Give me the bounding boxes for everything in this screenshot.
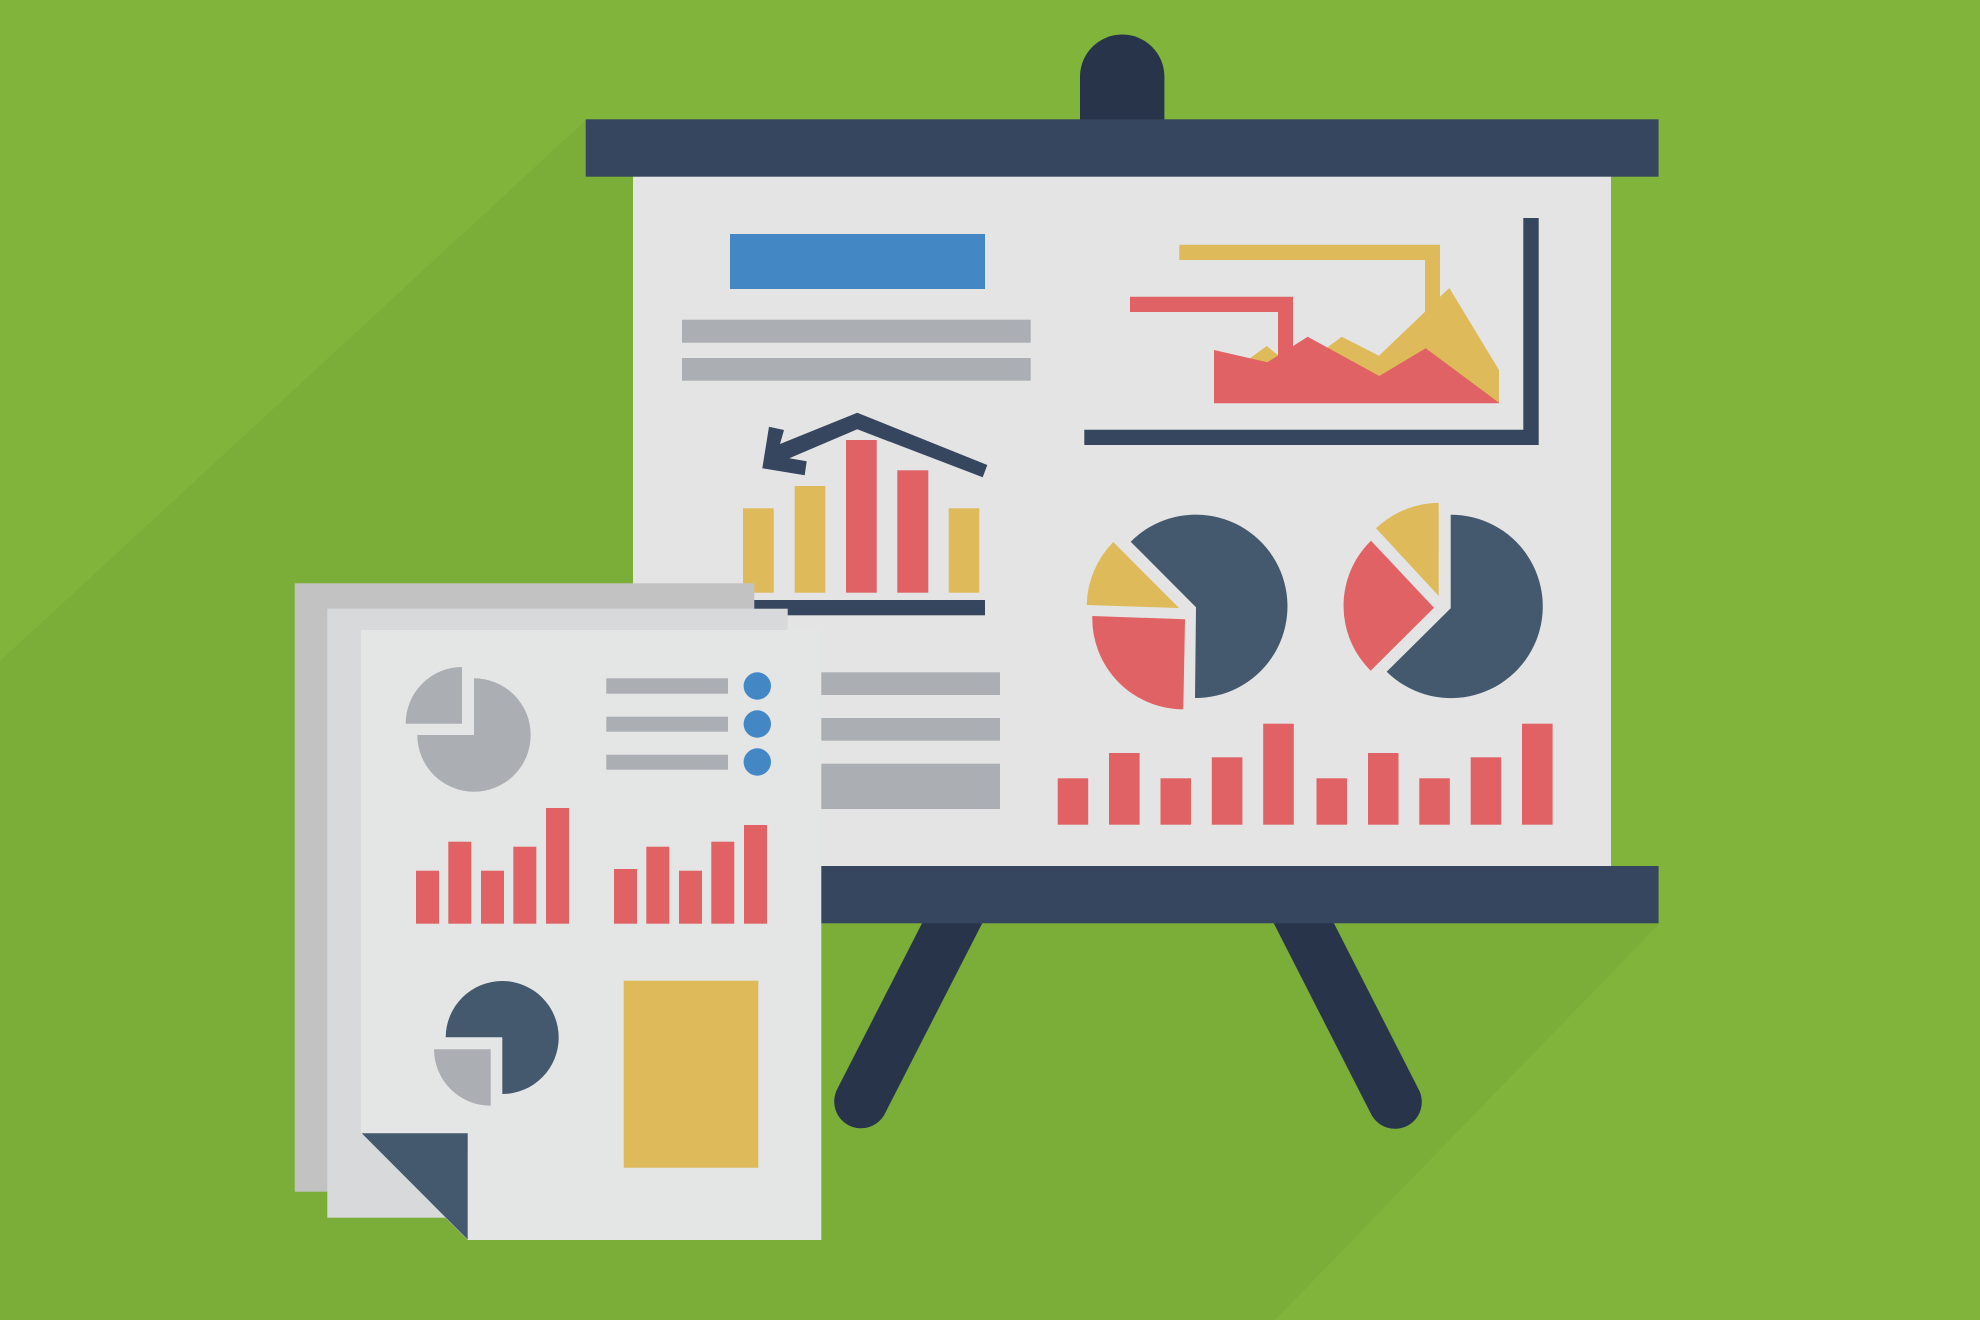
- grey line one: [821, 672, 1000, 695]
- middle report sheet: [327, 609, 788, 1218]
- red area series: [1214, 337, 1499, 403]
- top roller bar: [586, 119, 1659, 177]
- bottom roller bar: [780, 866, 1659, 923]
- right pie chart: [1344, 503, 1543, 698]
- right easel leg: [1292, 900, 1395, 1102]
- folded corner: [362, 1133, 468, 1240]
- red slice: [1092, 616, 1185, 709]
- area chart: [1084, 218, 1539, 445]
- red callout connector: [1130, 297, 1293, 365]
- bar 3: [846, 440, 877, 593]
- blue title block: [730, 234, 985, 289]
- bar 4: [897, 470, 928, 593]
- back report sheet: [295, 583, 754, 1192]
- navy slice: [1131, 515, 1287, 698]
- screen text blocks: [821, 672, 1000, 809]
- trend arrow: [762, 413, 987, 477]
- grey line two: [821, 718, 1000, 741]
- bottom bar chart on screen: [1058, 724, 1553, 825]
- yellow slice: [1376, 503, 1439, 596]
- navy slice: [1387, 515, 1543, 698]
- yellow image block: [624, 981, 758, 1168]
- left bar chart: [416, 808, 569, 924]
- front report sheet: [361, 630, 821, 1240]
- easel: [586, 34, 1659, 1102]
- bar 1: [743, 508, 774, 593]
- grey block: [821, 764, 1000, 809]
- left easel leg: [861, 900, 964, 1102]
- long diagonal shadow: [0, 120, 1658, 1320]
- yellow area series: [1250, 288, 1499, 403]
- text lines: [606, 678, 728, 770]
- chart baseline: [743, 600, 985, 615]
- bar chart with trend arrow: [743, 413, 987, 615]
- sheet body: [361, 630, 821, 1240]
- red slice: [1344, 541, 1434, 671]
- yellow callout connector: [1179, 245, 1440, 320]
- navy and grey pie chart: [434, 981, 559, 1106]
- chart axes: [1084, 218, 1539, 445]
- projection screen: [633, 170, 1611, 880]
- panel: title and text lines: [682, 234, 1031, 381]
- bar 2: [795, 486, 825, 593]
- grey pie chart: [406, 667, 531, 792]
- text line two: [682, 358, 1031, 381]
- blue bullets: [744, 672, 771, 776]
- left pie chart: [1087, 515, 1287, 709]
- bar 5: [949, 508, 979, 593]
- yellow slice: [1087, 542, 1179, 608]
- easel top knob: [1080, 34, 1164, 125]
- text line one: [682, 320, 1031, 343]
- right bar chart: [614, 825, 767, 924]
